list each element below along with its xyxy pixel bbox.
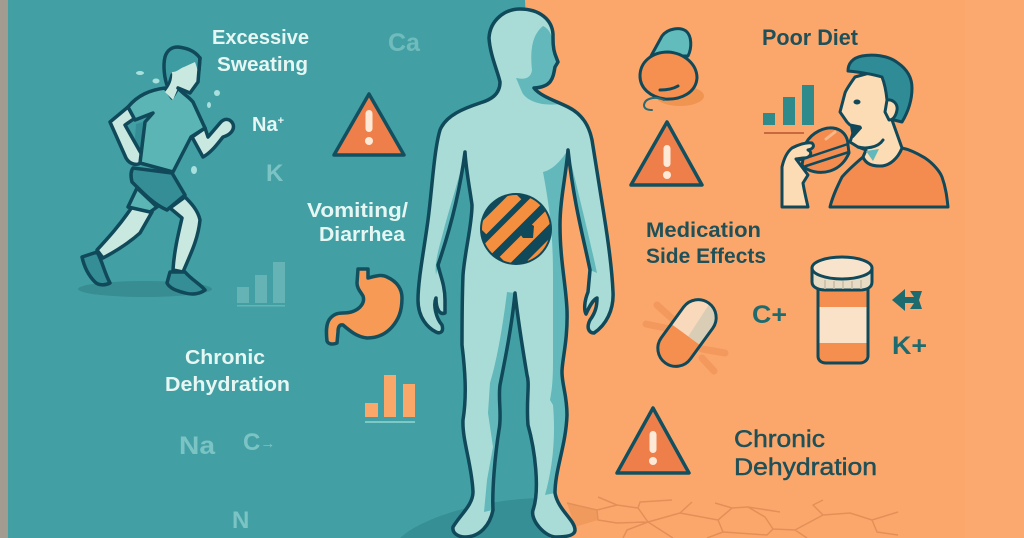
ion label: Na+: + (278, 115, 284, 127)
label: Medication Side Effects: Medication (646, 219, 761, 242)
shirt (830, 148, 948, 207)
shirt (128, 88, 205, 172)
front shoe (167, 272, 205, 294)
label: Medication Side Effects: Side Effects (646, 245, 766, 268)
runner neck and face (165, 62, 198, 100)
runner illustration (78, 47, 233, 297)
man eating a burger (782, 55, 948, 207)
disc notch (512, 221, 534, 238)
warning triangle left (334, 94, 404, 155)
icon: stomach (326, 269, 402, 344)
arm gap shadow (134, 122, 143, 160)
icon: pill with splashes (646, 292, 725, 374)
ion label: C arrow: → (260, 435, 275, 452)
back shoe (82, 252, 110, 285)
label: Excessive Sweating (212, 27, 309, 76)
body fill (418, 9, 613, 537)
cracked ground (567, 497, 898, 538)
human body figure (418, 9, 613, 537)
label: Chronic Dehydration left: Dehydration (165, 374, 290, 396)
front leg (170, 197, 200, 272)
back shorts (128, 188, 157, 212)
icon: arrow (892, 289, 922, 311)
label: Vomiting/Diarrhea (307, 200, 408, 246)
rear arm (110, 107, 142, 164)
hand (782, 143, 813, 207)
ground shadow under figure (400, 498, 550, 538)
back leg (97, 207, 152, 258)
ion label: Na: Na (179, 432, 216, 460)
jaw line (858, 140, 883, 148)
blob (640, 52, 697, 99)
label: Chronic Dehydration left: Chronic (185, 347, 265, 369)
label: Chronic Dehydration right: Chronic (734, 426, 825, 453)
panel: teal left background (0, 0, 560, 538)
stomach disc with stripes (480, 193, 552, 265)
label: Excessive Sweating: Excessive (212, 27, 309, 49)
icon: medicine bottle (812, 257, 872, 363)
ion label: C arrow: C (243, 429, 260, 456)
label: Excessive Sweating: Sweating (217, 54, 308, 76)
label: Vomiting/Diarrhea: Vomiting/ (307, 200, 408, 222)
blob tail (644, 98, 664, 110)
neck and face (840, 70, 902, 166)
eye (854, 100, 860, 104)
ion label: Na+: Na (252, 114, 278, 136)
warning triangle bottom right (617, 408, 689, 473)
ion label: K+: K+ (892, 332, 927, 360)
burger (800, 128, 849, 172)
blob shadow (656, 86, 704, 106)
teal bar chart (763, 85, 814, 134)
capsule (651, 29, 691, 56)
hair (848, 55, 912, 122)
ion label: C+: C+ (752, 301, 787, 329)
ion label: Ca: Ca (388, 29, 421, 57)
open mouth (851, 126, 861, 137)
runner ground shadow (78, 281, 212, 297)
ear (885, 100, 897, 120)
sweat droplets (136, 71, 220, 174)
panel: orange right background (525, 0, 1024, 538)
faded bar chart left (237, 262, 285, 306)
label: Chronic Dehydration right: Dehydration (734, 454, 877, 481)
ion label: N: N (232, 507, 249, 534)
warning triangle top right (631, 122, 702, 185)
orange bar chart (365, 375, 415, 423)
forearm and fist (192, 119, 233, 157)
label: Poor Diet: Poor Diet (762, 25, 859, 50)
label: Medication Side Effects (646, 219, 766, 268)
ion label: K: K (266, 160, 284, 187)
icon: capsule and orange blob (640, 29, 704, 110)
body outline (418, 9, 613, 537)
label: Chronic Dehydration right (734, 426, 877, 481)
body shading (436, 26, 597, 512)
neck shade (866, 149, 879, 161)
label: Chronic Dehydration left (165, 347, 290, 396)
runner hair (164, 47, 200, 88)
label: Vomiting/Diarrhea: Diarrhea (319, 224, 406, 246)
shorts (131, 168, 185, 210)
